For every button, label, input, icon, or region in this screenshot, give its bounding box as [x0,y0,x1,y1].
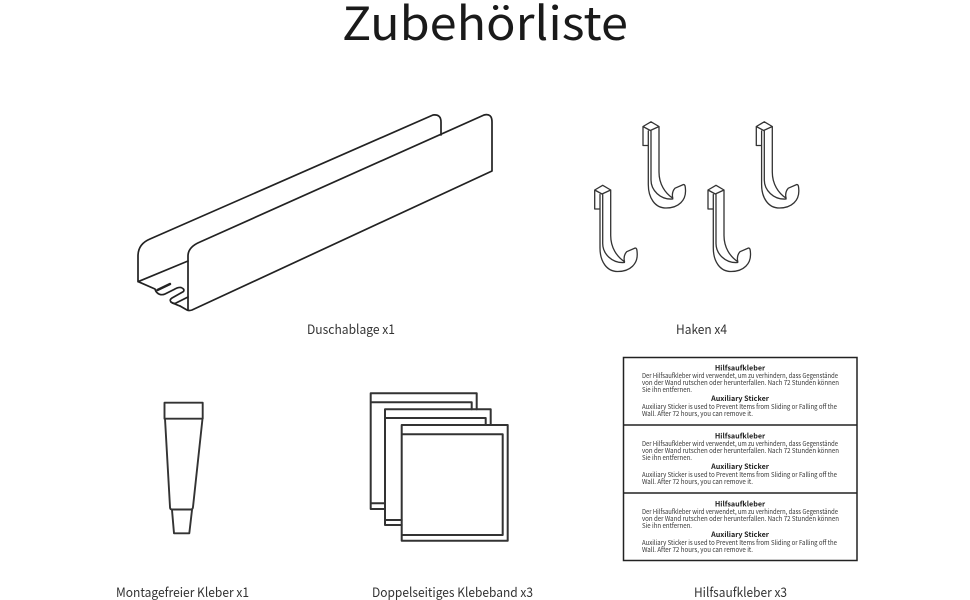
label: Haken: Haken x4 [676,319,727,338]
icon: shower shelf [138,115,492,311]
sticker 1 text: Hilfsaufkleber [715,364,766,374]
sticker 3 text: Wall. After 72 hours, you can remove it. [642,544,753,554]
sticker 3 text: von der Wand rutschen oder herunterfallen. Nach 72 Stunden können [642,513,839,523]
sticker outline [624,358,857,560]
sticker 1 text: Wall. After 72 hours, you can remove it. [642,408,753,418]
icon: glue tube [164,403,203,533]
hook bottom left [595,185,637,272]
icon: hooks [595,122,799,272]
tape sheet middle [385,409,491,525]
sticker 2 text [642,432,839,486]
sticker 3 text: Hilfsaufkleber [715,500,766,510]
sticker 2 text: Auxiliary Sticker is used to Prevent Items from Sliding or Falling off the [642,469,837,479]
sticker 3 text: Der Hilfsaufkleber wird verwendet, um zu verhindern, dass Gegenstände [642,506,838,516]
icon: double-sided tape [371,393,508,541]
sticker 2 text: Wall. After 72 hours, you can remove it. [642,476,753,486]
tape sheet front [402,425,508,541]
hook bottom right [708,185,751,272]
sticker 3 text: Auxiliary Sticker [710,530,770,540]
sticker 2 text: von der Wand rutschen oder herunterfallen. Nach 72 Stunden können [642,445,839,455]
hook top left [643,122,686,208]
hook top right [756,122,799,208]
sticker 2 text: Auxiliary Sticker [710,462,770,472]
sticker 1 text [642,364,839,418]
sticker 1 text: Auxiliary Sticker is used to Prevent Items from Sliding or Falling off the [642,401,837,411]
sticker 2 text: Sie ihn entfernen. [642,452,692,462]
sticker 3 text: Auxiliary Sticker is used to Prevent Items from Sliding or Falling off the [642,537,837,547]
sticker 1 text: von der Wand rutschen oder herunterfallen. Nach 72 Stunden können [642,377,839,387]
sticker 2 text: Hilfsaufkleber [715,432,766,442]
sticker 3 text: Sie ihn entfernen. [642,520,692,530]
sticker 1 text: Sie ihn entfernen. [642,384,692,394]
sticker 1 text: Auxiliary Sticker [710,394,770,404]
label: Duschablage: Duschablage x1 [307,319,395,338]
sticker 3 text [642,500,839,554]
sticker 2 text: Der Hilfsaufkleber wird verwendet, um zu verhindern, dass Gegenstände [642,438,838,448]
sticker 1 text: Der Hilfsaufkleber wird verwendet, um zu verhindern, dass Gegenstände [642,370,838,380]
panel: auxiliary stickers [624,358,857,560]
tape sheet back [371,393,477,509]
